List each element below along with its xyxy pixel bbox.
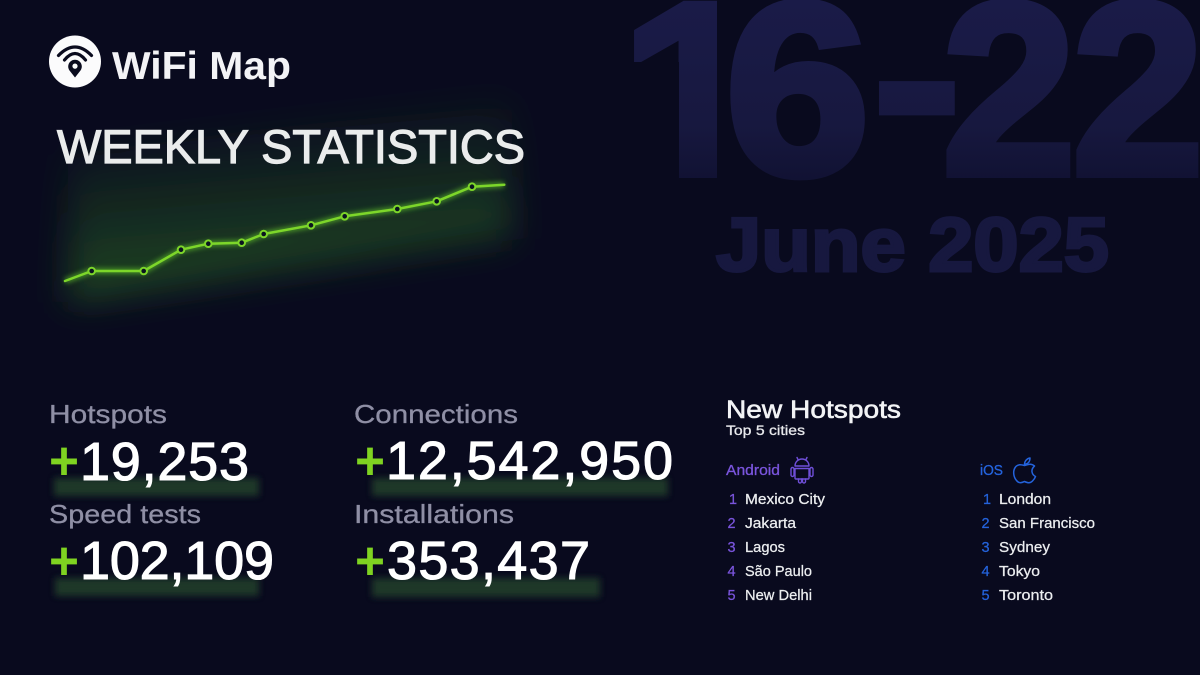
ios city list: San Francisco [999,516,1095,532]
subheading: Top 5 cities [726,423,805,438]
stat: connections: 12,542,950 [386,431,673,491]
stat: connections: + [355,431,385,491]
ios city list: Tokyo [999,564,1040,580]
android city list: 3 [728,540,736,556]
ios city list [982,492,1095,604]
ios city list: 4 [982,564,990,580]
stat: connections [354,399,673,496]
date range background [634,0,1198,180]
stat: speed tests [49,499,274,596]
ios city list: London [999,492,1051,508]
ios city list: Toronto [999,588,1053,604]
stat: connections: Connections [354,399,518,429]
logo icon [49,36,101,88]
month background: June 2025 [716,203,1109,288]
android city list: New Delhi [745,588,812,604]
android city list: Mexico City [745,492,826,508]
ios city list: 2 [982,516,990,532]
android city list: 5 [728,588,736,604]
line chart [65,183,504,281]
stat: hotspots [49,399,259,496]
stat: hotspots: + [49,431,79,491]
android city list: 1 [729,492,737,508]
title: WEEKLY STATISTICS [57,120,525,173]
android city list: Lagos [745,540,785,556]
stat: hotspots: 19,253 [80,432,249,492]
stat: speed tests: + [49,531,79,591]
icon: android [791,458,813,483]
ios city list: 5 [982,588,990,604]
logo wordmark: WiFi Map [112,45,291,88]
chart glow area [68,95,512,303]
stat: hotspots: Hotspots [49,399,167,429]
android city list: Jakarta [745,516,797,532]
stat: installations [354,499,600,597]
android city list: São Paulo [745,564,812,580]
android city list [728,492,826,604]
icon: apple [1014,458,1036,483]
stat: speed tests: Speed tests [49,499,201,529]
ios label: iOS [980,463,1003,479]
ios city list: 1 [983,492,991,508]
stat: installations: Installations [354,499,514,529]
android city list: 4 [728,564,736,580]
stat: installations: 353,437 [387,531,590,591]
stat: speed tests: 102,109 [80,531,274,591]
stat: installations: + [355,531,385,591]
ios city list: 3 [982,540,990,556]
new hotspots heading: New Hotspots [726,396,901,424]
ios city list: Sydney [999,540,1051,556]
android label: Android [726,463,780,479]
android city list: 2 [728,516,736,532]
